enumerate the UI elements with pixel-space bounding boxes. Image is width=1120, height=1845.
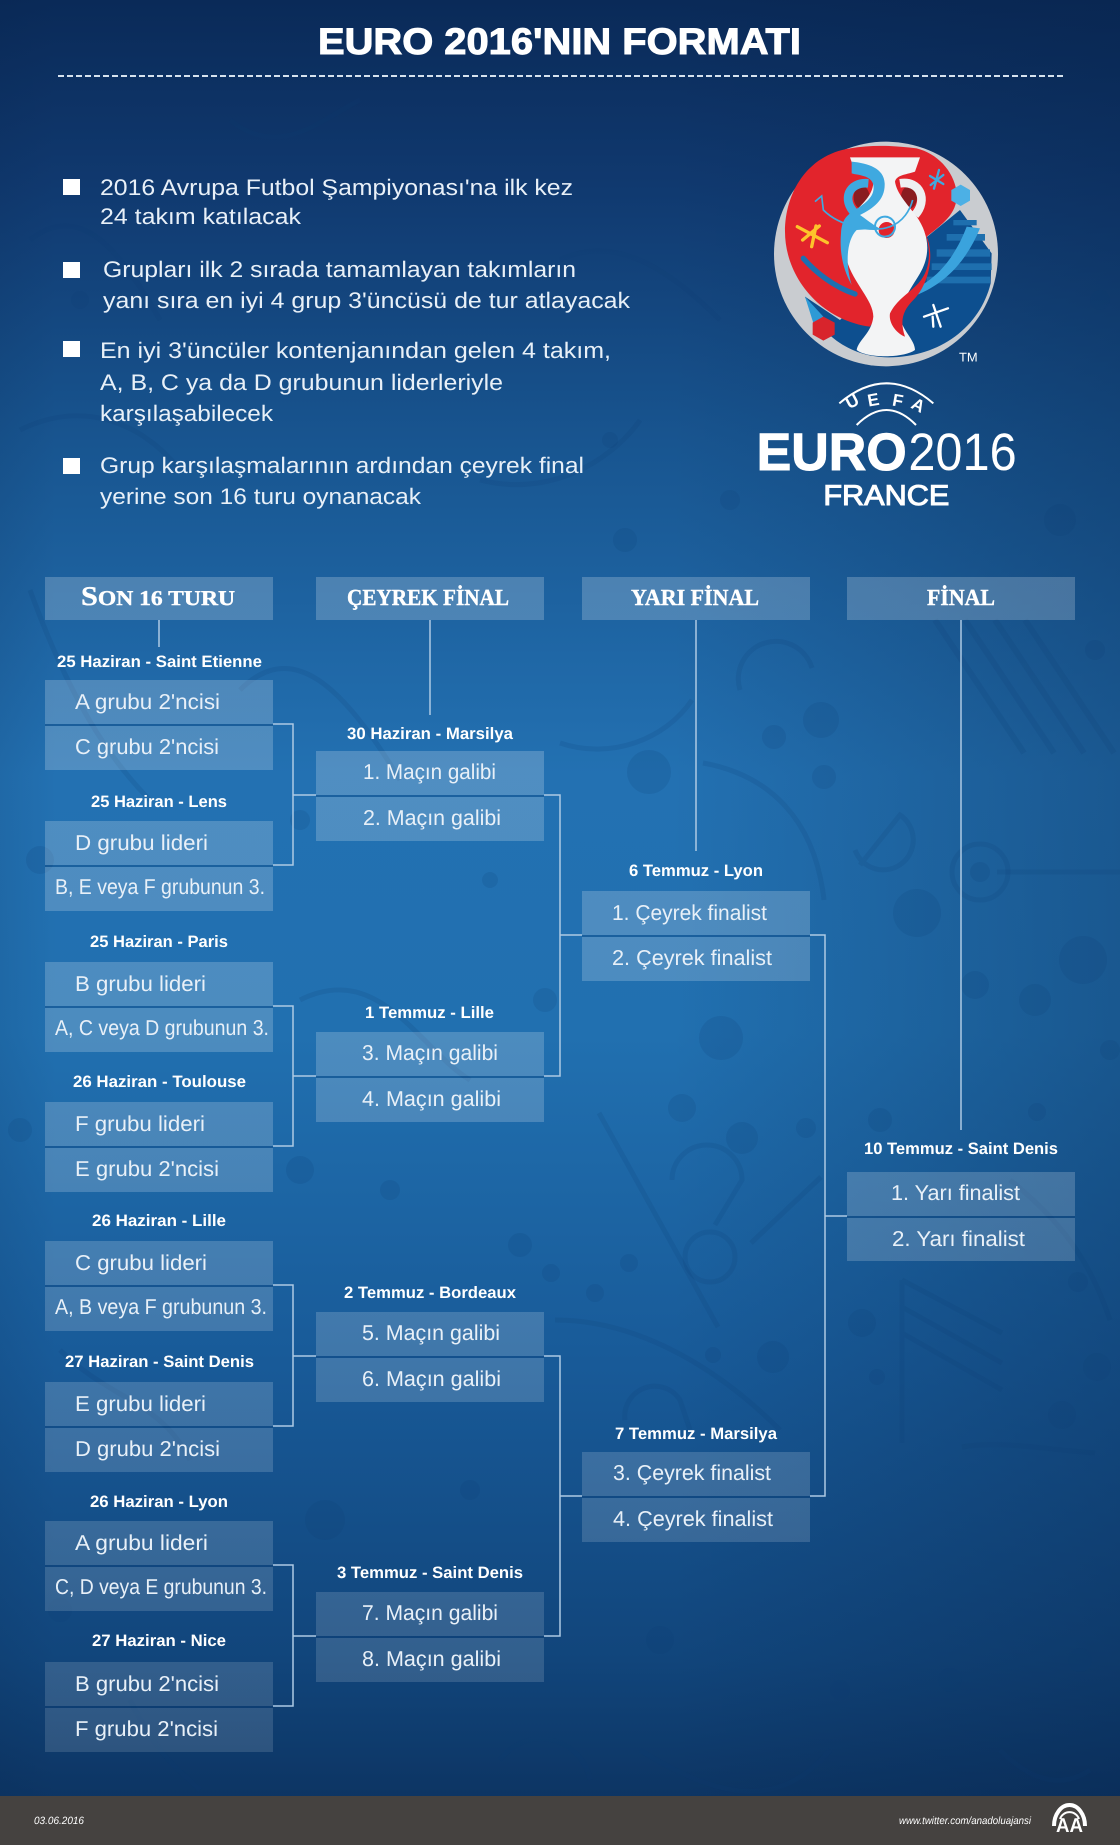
match: 25 Haziran - Lens <box>45 793 273 911</box>
slot: 1. Maçın galibi <box>316 751 544 797</box>
UEFA wordmark: E <box>866 390 881 411</box>
match: 25 Haziran - Saint Etienne <box>45 653 273 770</box>
footer <box>0 1796 1120 1845</box>
trademark: TM <box>959 351 978 365</box>
match: 2 Temmuz - Bordeaux: 2 Temmuz - Bordeaux <box>344 1284 517 1302</box>
match: 10 Temmuz - Saint Denis <box>847 1140 1075 1261</box>
slot: A grubu lideri: A grubu lideri <box>75 1531 208 1555</box>
match: 25 Haziran - Saint Etienne: 25 Haziran - Saint Etienne <box>57 653 262 671</box>
icon: Anadolu Agency logo: AA <box>1056 1815 1083 1837</box>
match: 30 Haziran - Marsilya: 30 Haziran - Marsilya <box>347 725 514 743</box>
match: 6 Temmuz - Lyon: 6 Temmuz - Lyon <box>629 862 763 880</box>
slot: C grubu 2'ncisi <box>45 726 273 770</box>
slot: 4. Maçın galibi <box>316 1078 544 1122</box>
match: 25 Haziran - Paris <box>45 933 273 1052</box>
slot: 1. Çeyrek finalist <box>582 891 810 937</box>
slot: B grubu 2'ncisi: B grubu 2'ncisi <box>75 1672 219 1696</box>
slot: 1. Yarı finalist <box>847 1172 1075 1218</box>
bullet 1: 2016 Avrupa Futbol Şampiyonası'na ilk kez <box>100 175 573 200</box>
bullet 3 <box>63 338 611 426</box>
slot: 1. Yarı finalist: 1. Yarı finalist <box>891 1181 1020 1205</box>
column header: Son 16 turu: SON 16 TURU <box>81 581 235 611</box>
text block: format rules <box>63 175 631 509</box>
logo: UEFA Euro 2016 <box>757 142 1017 511</box>
slot: 6. Maçın galibi: 6. Maçın galibi <box>362 1367 501 1391</box>
match: 1 Temmuz - Lille <box>316 1004 544 1122</box>
bullet 1 <box>63 175 573 229</box>
match: 27 Haziran - Nice: 27 Haziran - Nice <box>92 1632 226 1650</box>
slot: C, D veya E grubunun 3. <box>45 1567 273 1611</box>
slot: C grubu lideri: C grubu lideri <box>75 1251 207 1275</box>
slot: D grubu lideri <box>45 821 273 867</box>
slot: 1. Çeyrek finalist: 1. Çeyrek finalist <box>612 901 767 925</box>
match: 26 Haziran - Lille: 26 Haziran - Lille <box>92 1212 226 1230</box>
match: 1 Temmuz - Lille: 1 Temmuz - Lille <box>365 1004 494 1022</box>
slot: E grubu 2'ncisi <box>45 1148 273 1192</box>
match: 25 Haziran - Lens: 25 Haziran - Lens <box>91 793 227 811</box>
EURO2016 wordmark <box>757 423 1017 481</box>
slot: 6. Maçın galibi <box>316 1358 544 1402</box>
slot: F grubu lideri <box>45 1102 273 1148</box>
match: 30 Haziran - Marsilya <box>316 725 544 841</box>
column header: Çeyrek final: ÇEYREK FİNAL <box>347 585 509 610</box>
slot: E grubu lideri <box>45 1382 273 1428</box>
date: 03.06.2016 <box>34 1815 84 1827</box>
slot: 5. Maçın galibi: 5. Maçın galibi <box>362 1321 500 1345</box>
slot: F grubu 2'ncisi: F grubu 2'ncisi <box>75 1717 218 1741</box>
slot: D grubu 2'ncisi <box>45 1428 273 1472</box>
slot: A, C veya D grubunun 3. <box>45 1008 273 1052</box>
slot: D grubu 2'ncisi: D grubu 2'ncisi <box>75 1437 220 1461</box>
slot: F grubu 2'ncisi <box>45 1708 273 1752</box>
slot: C grubu lideri <box>45 1241 273 1287</box>
match: 10 Temmuz - Saint Denis: 10 Temmuz - Saint Denis <box>864 1140 1058 1158</box>
slot: E grubu lideri: E grubu lideri <box>75 1392 206 1416</box>
match: 25 Haziran - Paris: 25 Haziran - Paris <box>90 933 228 951</box>
EURO2016 wordmark: EURO <box>757 423 907 481</box>
slot: 2. Maçın galibi: 2. Maçın galibi <box>363 806 501 830</box>
slot: A grubu lideri <box>45 1521 273 1567</box>
match: 27 Haziran - Saint Denis: 27 Haziran - Saint Denis <box>65 1353 254 1371</box>
slot: 8. Maçın galibi <box>316 1638 544 1682</box>
UEFA wordmark <box>839 383 933 425</box>
bullet 2: yanı sıra en iyi 4 grup 3'üncüsü de tur atlayacak <box>103 288 631 313</box>
column header: Final <box>847 577 1075 620</box>
slot: A grubu 2'ncisi: A grubu 2'ncisi <box>75 690 220 714</box>
match: 26 Haziran - Lille <box>45 1212 273 1331</box>
FRANCE wordmark: FRANCE <box>823 479 949 511</box>
bullet 2: Grupları ilk 2 sırada tamamlayan takımların <box>103 257 576 282</box>
slot: F grubu lideri: F grubu lideri <box>75 1112 205 1136</box>
UEFA wordmark: A <box>908 394 928 417</box>
column header: Çeyrek final <box>316 577 544 620</box>
bullet 2 <box>63 257 631 313</box>
match: 27 Haziran - Nice <box>45 1632 273 1752</box>
match: 26 Haziran - Lyon <box>45 1493 273 1611</box>
slot: B, E veya F grubunun 3. <box>45 867 273 911</box>
slot: A, C veya D grubunun 3.: A, C veya D grubunun 3. <box>55 1016 269 1040</box>
match: 26 Haziran - Toulouse: 26 Haziran - Toulouse <box>73 1073 246 1091</box>
slot: 1. Maçın galibi: 1. Maçın galibi <box>363 760 496 784</box>
icon: Anadolu Agency logo <box>1054 1805 1085 1837</box>
title: EURO 2016'NIN FORMATI <box>318 21 801 62</box>
emblem <box>774 142 998 366</box>
slot: D grubu lideri: D grubu lideri <box>75 831 208 855</box>
match: 2 Temmuz - Bordeaux <box>316 1284 544 1402</box>
match: 26 Haziran - Lyon: 26 Haziran - Lyon <box>90 1493 228 1511</box>
column header: Yarı final: YARI FİNAL <box>631 585 759 610</box>
EURO2016 wordmark: 2016 <box>908 423 1017 481</box>
match: 3 Temmuz - Saint Denis: 3 Temmuz - Saint Denis <box>337 1564 523 1582</box>
slot: 7. Maçın galibi: 7. Maçın galibi <box>362 1601 498 1625</box>
bullet 3: karşılaşabilecek <box>100 401 274 426</box>
bullet 4 <box>63 453 584 509</box>
slot: B grubu 2'ncisi <box>45 1662 273 1708</box>
bullet 4: yerine son 16 turu oynanacak <box>100 484 422 509</box>
UEFA wordmark: F <box>891 390 905 411</box>
match: 3 Temmuz - Saint Denis <box>316 1564 544 1682</box>
source url: www.twitter.com/anadoluajansi <box>899 1815 1032 1827</box>
slot: 2. Yarı finalist: 2. Yarı finalist <box>892 1227 1025 1251</box>
column header: Final: FİNAL <box>927 585 995 610</box>
slot: 2. Çeyrek finalist <box>582 937 810 981</box>
slot: 3. Maçın galibi: 3. Maçın galibi <box>362 1041 498 1065</box>
slot: 4. Çeyrek finalist <box>582 1498 810 1542</box>
slot: C grubu 2'ncisi: C grubu 2'ncisi <box>75 735 219 759</box>
slot: 7. Maçın galibi <box>316 1592 544 1638</box>
match: 7 Temmuz - Marsilya <box>582 1425 810 1542</box>
slot: A, B veya F grubunun 3. <box>45 1287 273 1331</box>
column header: Yarı final <box>582 577 810 620</box>
slot: C, D veya E grubunun 3.: C, D veya E grubunun 3. <box>55 1575 267 1599</box>
slot: 3. Çeyrek finalist <box>582 1452 810 1498</box>
match: 7 Temmuz - Marsilya: 7 Temmuz - Marsilya <box>615 1425 778 1443</box>
bullet 3: A, B, C ya da D grubunun liderleriyle <box>100 370 503 395</box>
slot: B, E veya F grubunun 3.: B, E veya F grubunun 3. <box>55 875 265 899</box>
match: 27 Haziran - Saint Denis <box>45 1353 273 1472</box>
slot: B grubu lideri: B grubu lideri <box>75 972 206 996</box>
slot: 4. Maçın galibi: 4. Maçın galibi <box>362 1087 501 1111</box>
column header: Son 16 turu <box>45 577 273 620</box>
slot: 3. Çeyrek finalist: 3. Çeyrek finalist <box>613 1461 771 1485</box>
slot: 5. Maçın galibi <box>316 1312 544 1358</box>
UEFA wordmark: U <box>842 390 862 413</box>
slot: B grubu lideri <box>45 962 273 1008</box>
slot: A, B veya F grubunun 3.: A, B veya F grubunun 3. <box>55 1295 267 1319</box>
slot: A grubu 2'ncisi <box>45 680 273 726</box>
slot: 8. Maçın galibi: 8. Maçın galibi <box>362 1647 501 1671</box>
slot: 2. Maçın galibi <box>316 797 544 841</box>
slot: 3. Maçın galibi <box>316 1032 544 1078</box>
bullet 1: 24 takım katılacak <box>100 204 302 229</box>
slot: 4. Çeyrek finalist: 4. Çeyrek finalist <box>613 1507 773 1531</box>
bullet 4: Grup karşılaşmalarının ardından çeyrek final <box>100 453 584 478</box>
slot: 2. Yarı finalist <box>847 1218 1075 1261</box>
match: 26 Haziran - Toulouse <box>45 1073 273 1192</box>
slot: E grubu 2'ncisi: E grubu 2'ncisi <box>75 1157 219 1181</box>
match: 6 Temmuz - Lyon <box>582 862 810 981</box>
slot: 2. Çeyrek finalist: 2. Çeyrek finalist <box>612 946 772 970</box>
bullet 3: En iyi 3'üncüler kontenjanından gelen 4 takım, <box>100 338 611 363</box>
bracket connectors <box>159 620 961 1706</box>
